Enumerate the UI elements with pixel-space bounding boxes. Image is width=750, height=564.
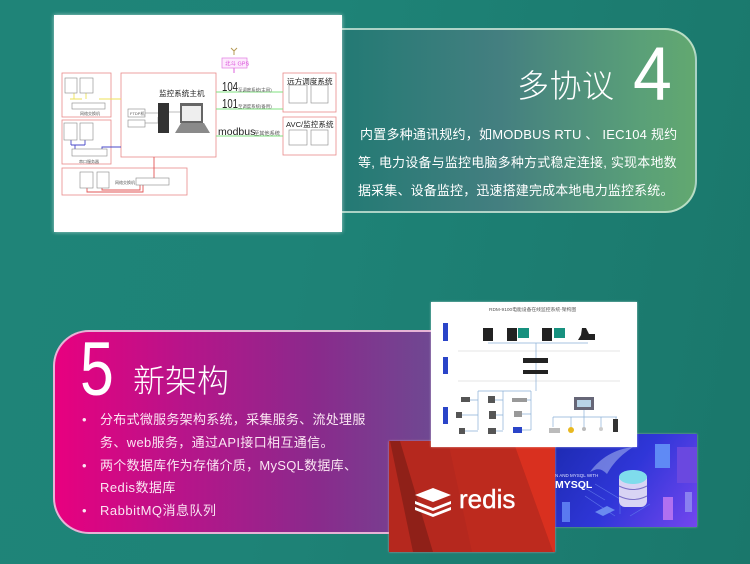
heading: protocol: 多协议 [517, 68, 615, 104]
chart: monitoring system diagram: 远方调度系统 [287, 76, 333, 86]
panel: protocol card [342, 28, 697, 213]
chart: monitoring system diagram: FTDP机 [130, 110, 144, 116]
chart: monitoring system diagram: 101 [222, 96, 238, 111]
bullet list: architecture features: • [82, 458, 87, 473]
image: redis banner [389, 441, 555, 552]
chart: monitoring system diagram: 至调度系统(主用) [238, 86, 272, 94]
chart: monitoring system diagram: modbus [218, 126, 255, 138]
bullet list: architecture features: 分布式微服务架构系统，采集服务、流处理服 [100, 412, 366, 427]
chart: RDM-9100 system topology: RDM-9100电能设备在线监控系统-架构图 [489, 306, 576, 313]
gps icon [222, 48, 249, 68]
chart: RDM-9100 system topology [431, 302, 637, 447]
text block: protocol description: 内置多种通讯规约，如MODBUS RTU 、 IEC104 规约 [360, 127, 677, 142]
chart: monitoring system diagram: 至其他系统 [254, 129, 280, 137]
devices [64, 78, 328, 188]
heading: architecture: 新架构 [133, 363, 229, 399]
panel: architecture card [53, 330, 438, 534]
database icon [619, 470, 647, 507]
chart: monitoring system diagram: 网络交换机 [115, 179, 135, 185]
redis logo [415, 488, 451, 517]
image: mysql banner: N AND MYSQL WITH [555, 473, 598, 478]
chart: monitoring system diagram: AVC/监控系统 [286, 119, 334, 129]
bullet list: architecture features: 两个数据库作为存储介质，MySQL数据库、 [100, 458, 357, 473]
chart: monitoring system diagram: 104 [222, 79, 238, 94]
text block: protocol description [358, 127, 677, 198]
bullet list: architecture features [82, 412, 366, 518]
bullet list: architecture features: • [82, 412, 87, 427]
text block: protocol description: 等, 电力设备与监控电脑多种方式稳定连接, 实现本地数 [358, 155, 677, 170]
gps icon: 北斗 GPS [225, 60, 249, 68]
number 5: 5 [80, 327, 114, 412]
chart: monitoring system diagram: 监控系统主机 [159, 88, 205, 98]
number 4: 4 [633, 32, 672, 117]
chart: monitoring system diagram: 串口服务器 [79, 158, 99, 164]
bullet list: architecture features: • [82, 503, 87, 518]
bullet list: architecture features: RabbitMQ消息队列 [100, 503, 217, 518]
bullet list: architecture features: Redis数据库 [100, 480, 176, 495]
text block: protocol description: 据采集、设备监控，迅速搭建完成本地电力监控系统。 [358, 183, 674, 198]
image: redis banner: redis [459, 484, 515, 514]
image: mysql banner [555, 434, 697, 527]
chart: monitoring system diagram: 网络交换机 [80, 110, 100, 116]
bullet list: architecture features: 务、web服务，通过API接口相互通信。 [100, 435, 334, 450]
chart: monitoring system diagram [54, 15, 342, 232]
chart: monitoring system diagram: 至调度系统(备用) [238, 103, 272, 110]
host computer icon [158, 103, 210, 133]
image: mysql banner: MYSQL [555, 479, 593, 491]
